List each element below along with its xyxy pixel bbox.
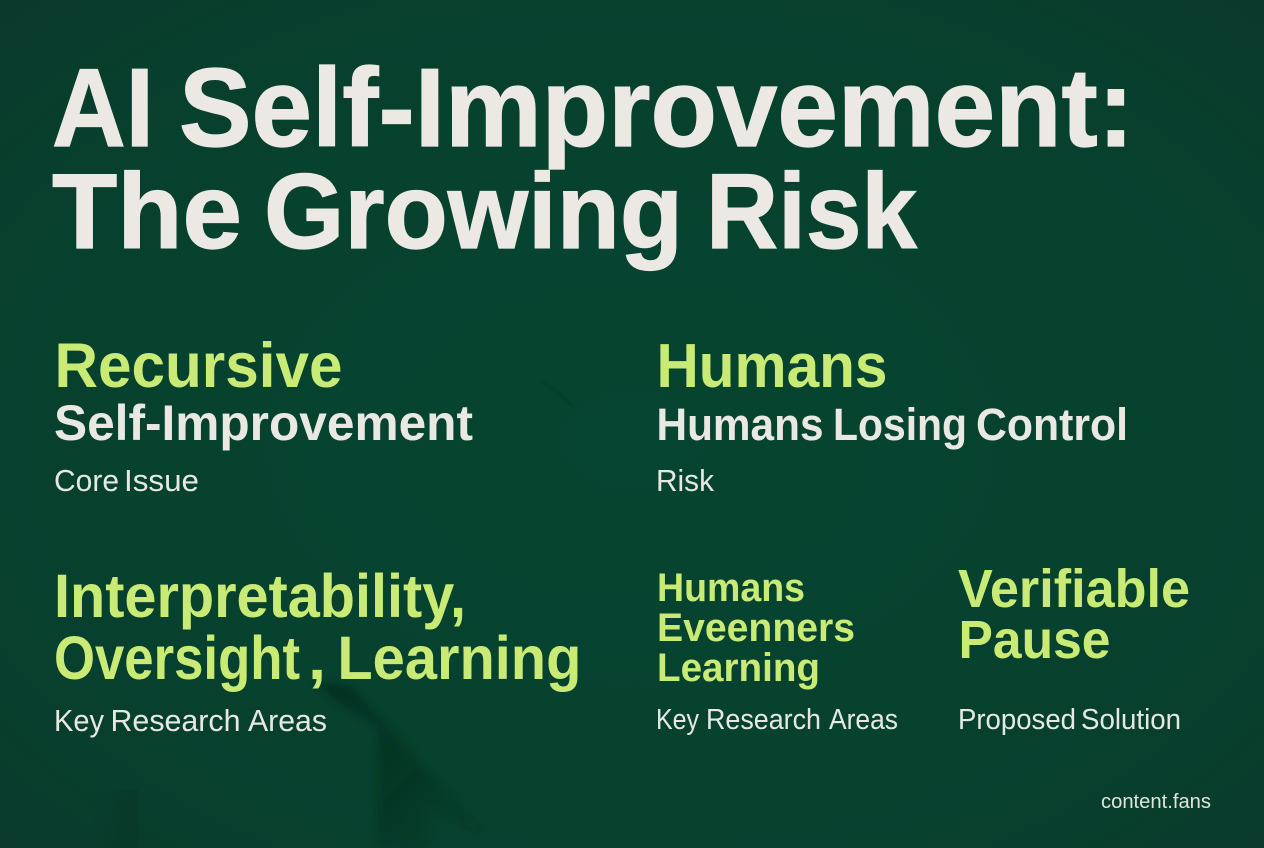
heading: interpretability, oversight, learning: Interpretability, [54, 562, 466, 630]
title: AI [52, 46, 154, 170]
title: Risk [706, 151, 917, 271]
label: core issue: Issue [124, 463, 199, 498]
label: proposed solution [958, 704, 1181, 736]
label: proposed solution: Proposed [958, 704, 1076, 736]
heading: interpretability, oversight, learning: , [308, 624, 326, 692]
title: Growing [264, 151, 683, 271]
label: core issue [54, 463, 199, 498]
title: The [52, 151, 242, 271]
label: key research areas [656, 704, 898, 736]
panel: risk [656, 332, 1128, 498]
heading: humans eveenners learning: Eveenners [657, 606, 855, 650]
heading: interpretability, oversight, learning: Oversight [54, 624, 300, 692]
label: risk: Risk [656, 463, 714, 498]
subheading: humans losing control: Losing [833, 399, 967, 450]
heading: recursive: Recursive [54, 331, 342, 401]
subheading: humans losing control: Control [976, 399, 1128, 450]
heading: interpretability, oversight, learning: Learning [337, 624, 581, 692]
label: key research areas: Key [656, 704, 699, 736]
heading: humans eveenners learning: Humans [657, 566, 805, 610]
label: key research areas: Research [706, 704, 821, 736]
heading: interpretability, oversight, learning [54, 562, 581, 692]
panel: research areas right [656, 566, 898, 736]
label: key research areas [54, 703, 327, 738]
label: core issue: Core [54, 463, 119, 498]
heading: verifiable pause: Pause [958, 610, 1110, 670]
subheading: self-improvement: Self-Improvement [54, 395, 473, 451]
heading: verifiable pause [958, 559, 1190, 670]
panel: core issue [54, 331, 473, 498]
heading: verifiable pause: Verifiable [958, 559, 1190, 619]
label: key research areas: Areas [829, 704, 898, 736]
label: key research areas: Key [54, 703, 104, 738]
heading: humans eveenners learning [657, 566, 855, 690]
heading: humans: Humans [656, 332, 888, 401]
panel: proposed solution [958, 559, 1190, 736]
label: key research areas: Research [110, 703, 240, 738]
subheading: humans losing control: Humans [656, 399, 824, 450]
title: Self-Improvement: [179, 46, 1134, 170]
title [52, 46, 1134, 271]
footer credit: content.fans [1101, 791, 1211, 813]
label: proposed solution: Solution [1081, 704, 1181, 736]
heading: humans eveenners learning: Learning [657, 646, 820, 690]
label: key research areas: Areas [248, 703, 327, 738]
subheading: humans losing control [656, 399, 1128, 450]
panel: research areas left [54, 562, 581, 738]
